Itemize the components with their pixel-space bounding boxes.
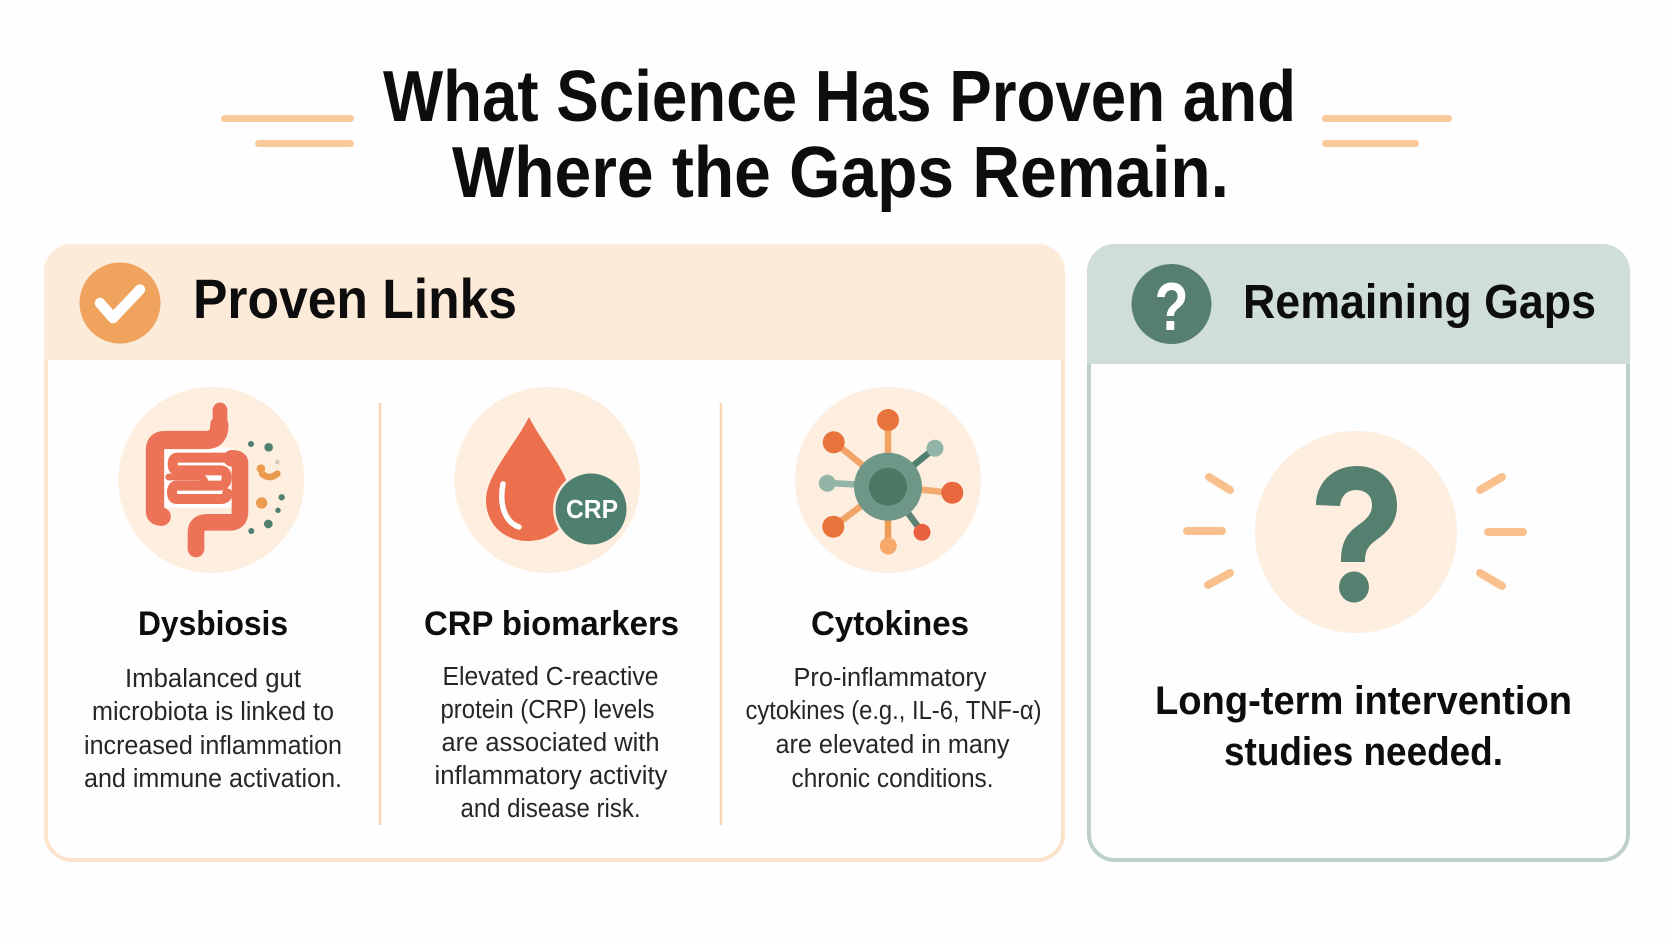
item: crp biomarkers: protein (CRP) levels	[440, 696, 654, 724]
item: dysbiosis: Dysbiosis	[138, 605, 288, 643]
item: cytokines: are elevated in many	[776, 731, 1010, 759]
item: crp biomarkers: CRP biomarkers	[424, 605, 679, 643]
icon: question badge	[1132, 264, 1212, 345]
item: dysbiosis: Imbalanced gut	[125, 665, 301, 693]
item: crp biomarkers: Elevated C-reactive	[442, 663, 658, 691]
item: dysbiosis: microbiota is linked to	[92, 698, 334, 726]
item: cytokines	[746, 605, 1042, 793]
item: dysbiosis	[84, 605, 342, 793]
item: dysbiosis: increased inflammation	[84, 732, 342, 760]
icon: check mark	[80, 262, 160, 344]
item: dysbiosis: and immune activation.	[84, 765, 342, 793]
text: long-term intervention studies needed	[1155, 679, 1572, 774]
item: crp biomarkers: and disease risk.	[460, 795, 640, 823]
title: Where the Gaps Remain.	[452, 133, 1229, 213]
icon: blood drop with CRP badge	[454, 387, 640, 573]
item: crp biomarkers: are associated with	[442, 729, 660, 757]
icon: large question mark with rays	[1187, 431, 1523, 633]
remaining gaps header band	[1087, 244, 1630, 364]
text: long-term intervention studies needed: studies needed.	[1224, 730, 1503, 774]
item: cytokines: Cytokines	[811, 605, 969, 643]
proven links header band	[44, 244, 1065, 360]
icon: question badge: ?	[1154, 269, 1188, 345]
icon: cytokine cell	[795, 387, 981, 573]
heading: proven links: Proven Links	[193, 267, 517, 330]
item: crp biomarkers: inflammatory activity	[434, 762, 668, 790]
title: What Science Has Proven and	[383, 57, 1296, 137]
text: long-term intervention studies needed: Long-term intervention	[1155, 679, 1572, 723]
title	[383, 57, 1296, 213]
panel: remaining gaps	[1087, 244, 1630, 860]
icon: gut with microbes	[118, 387, 304, 573]
item: cytokines: Pro-inflammatory	[794, 664, 987, 692]
item: cytokines: chronic conditions.	[792, 765, 994, 793]
item: cytokines: cytokines (e.g., IL-6, TNF-α)	[746, 697, 1042, 725]
panel: proven links	[44, 244, 1065, 860]
heading: remaining gaps: Remaining Gaps	[1243, 276, 1596, 329]
icon: blood drop with CRP badge: CRP	[566, 494, 618, 524]
item: crp biomarkers	[424, 605, 679, 823]
